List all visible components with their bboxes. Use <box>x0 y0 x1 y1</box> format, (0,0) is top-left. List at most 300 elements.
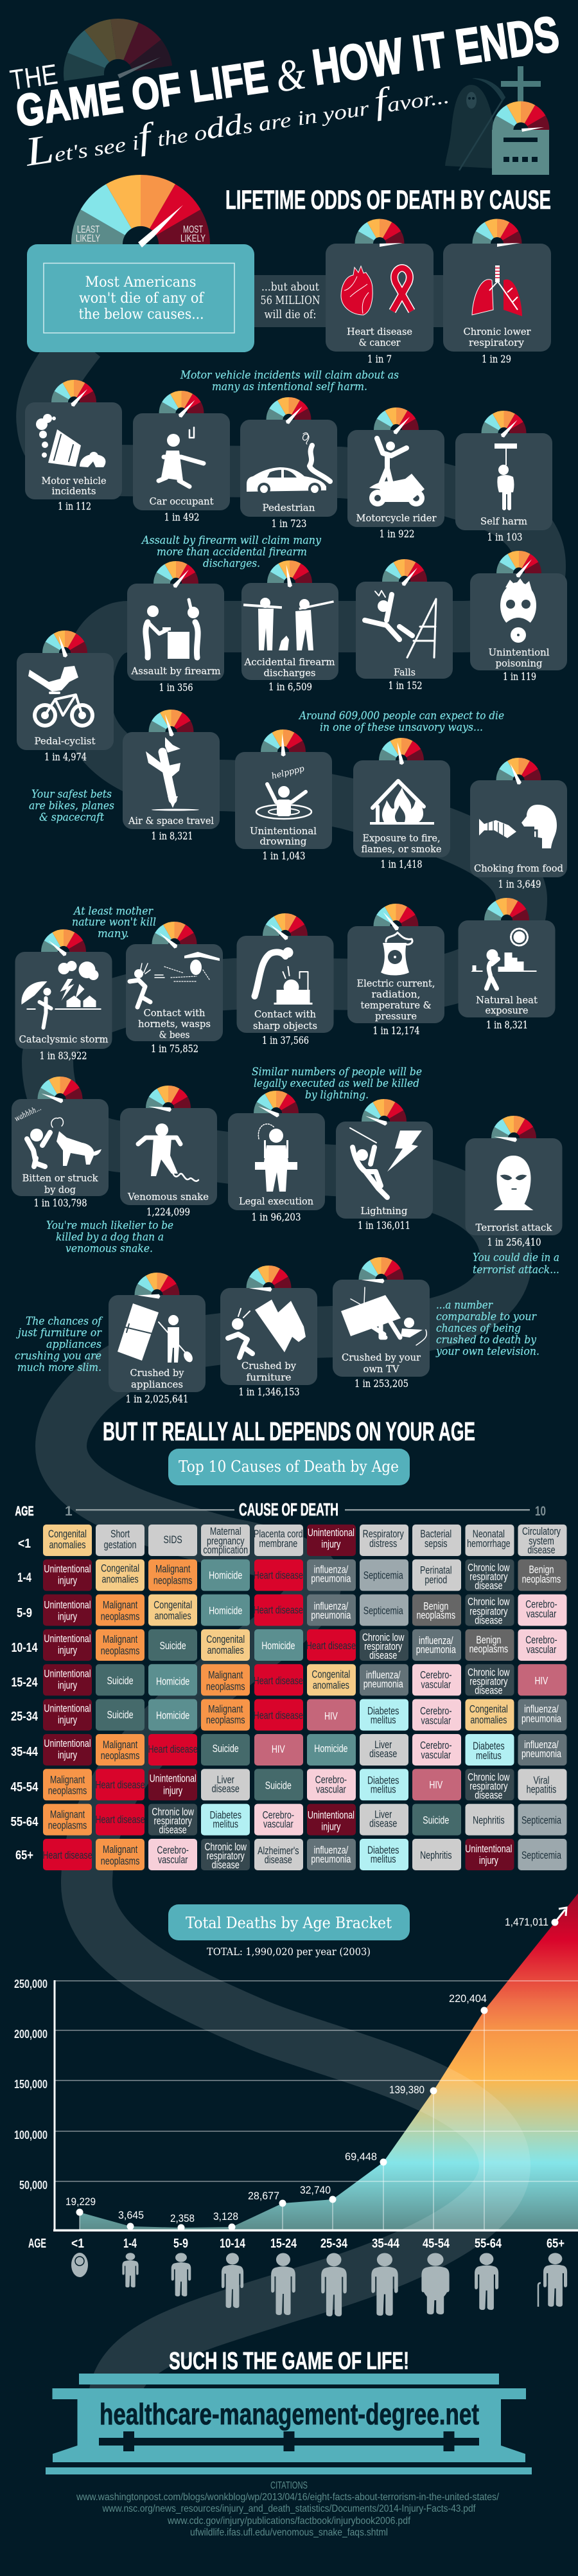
note: mother nature: nature won't kill <box>72 916 156 928</box>
row: under 1: SIDS <box>164 1534 182 1546</box>
card: electric current <box>347 904 444 1037</box>
row: 10-14: Unintentional <box>44 1633 91 1645</box>
row: 10-14: Cerebro- <box>525 1634 557 1647</box>
tomb with site name <box>46 2374 532 2474</box>
card: falls: Falls <box>394 666 416 678</box>
row: 25-34: Malignant <box>208 1704 243 1715</box>
row: 35-44: injury <box>58 1749 78 1762</box>
y axis labels: 100,000 <box>14 2129 48 2142</box>
row: 65 plus: Nephritis <box>420 1850 452 1862</box>
note: television <box>435 1299 539 1357</box>
card: air and space travel: 1 in 8,321 <box>152 830 193 842</box>
table: causes of death by age <box>42 1525 567 1872</box>
row: 1-4: Septicemia <box>363 1570 403 1582</box>
citations: www.washingtonpost.com/blogs/wonkblog/wp/2013/04/16/eight-facts-about-terrorism-in-the-united-states/ <box>76 2492 499 2503</box>
card: motor vehicle incidents: Motor vehicle <box>41 475 107 487</box>
card: crushed by furniture <box>220 1266 317 1398</box>
row: under 1: Congenital <box>48 1528 87 1541</box>
icon: electric chair <box>255 1124 297 1192</box>
card: chronic lower respiratory <box>443 219 551 365</box>
row: 35-44: HIV <box>272 1744 285 1756</box>
row: 65 plus: neoplasms <box>101 1856 139 1868</box>
card: hornets wasps bees: hornets, wasps <box>138 1018 211 1030</box>
winding road background <box>42 341 540 2404</box>
text: but about 56 million: will die of: <box>265 308 316 321</box>
card: terrorist attack <box>465 1116 563 1248</box>
card: terrorist attack: Terrorist attack <box>475 1222 552 1233</box>
row: 55-64: disease <box>369 1818 397 1830</box>
row: 5-9: Heart disease <box>254 1605 303 1616</box>
row: 10-14: Congenital <box>206 1634 245 1646</box>
card: unintentional poisoning <box>470 551 567 683</box>
note: legal execution and lightning <box>252 1066 422 1101</box>
main gauge with labels: LEAST <box>77 224 100 235</box>
row: 45-54: HIV <box>429 1780 442 1791</box>
table: age row labels: 45-54 <box>10 1780 39 1794</box>
card: heart disease and cancer: Heart disease <box>347 326 412 337</box>
row: 5-9: Homicide <box>209 1606 242 1617</box>
row: 25-34: Diabetes <box>367 1706 399 1717</box>
row: 45-54: injury <box>163 1785 183 1797</box>
row: 5-9: Cerebro- <box>525 1599 557 1611</box>
text: total per year: TOTAL: 1,990,020 per year (2003) <box>207 1945 371 1958</box>
row: 55-64: neoplasms <box>48 1820 87 1832</box>
row: 45-54: neoplasms <box>48 1785 87 1797</box>
card: accidental firearm discharges: 1 in 6,509 <box>268 681 312 693</box>
row: 35-44: disease <box>369 1748 397 1760</box>
y axis labels: 200,000 <box>14 2028 48 2041</box>
data labels: 220,404 <box>449 1992 487 2005</box>
row: 65 plus: disease <box>212 1859 240 1872</box>
data labels: 28,677 <box>248 2190 279 2202</box>
row: 1-4: Heart disease <box>254 1570 303 1582</box>
note: 609,000 <box>298 710 504 733</box>
note: appliances: appliances <box>46 1338 101 1350</box>
row: 10-14: neoplasms <box>469 1643 508 1656</box>
card: choking from food: Choking from food <box>474 863 563 874</box>
row: 55-64: Cerebro- <box>263 1810 294 1821</box>
row: 45-54: Malignant <box>50 1775 85 1786</box>
row: 15-24: disease <box>475 1685 502 1697</box>
data labels: 2,358 <box>170 2212 195 2224</box>
card: lightning: 1 in 136,011 <box>358 1219 410 1231</box>
table header: AGE <box>15 1504 33 1519</box>
row: 1-4: Unintentional <box>44 1564 91 1575</box>
card: falls: 1 in 152 <box>388 679 423 692</box>
row: 1-4: respiratory <box>469 1571 508 1583</box>
row: under 1: distress <box>369 1538 397 1550</box>
note: terrorist attack: You could die in a <box>473 1251 559 1264</box>
row: 45-54: vascular <box>316 1784 346 1796</box>
row: under 1: Bacterial <box>420 1528 451 1541</box>
table header: CAUSE OF DEATH <box>239 1499 338 1519</box>
row: 10-14: pneumonia <box>416 1644 457 1656</box>
row: 65 plus: disease <box>265 1854 292 1866</box>
card: legal execution <box>228 1091 325 1223</box>
icon: tombstone with gauge <box>492 66 550 175</box>
row: 5-9: injury <box>58 1611 78 1623</box>
data labels: 3,128 <box>213 2210 238 2223</box>
card: pedestrian <box>240 397 337 530</box>
row: 55-64: Heart disease <box>95 1814 145 1826</box>
heading: such is the game of life: SUCH IS THE GAME OF LIFE! <box>169 2348 409 2375</box>
card: accidental firearm discharges: Accidental firearm <box>244 656 335 668</box>
row: 45-54: Cerebro- <box>315 1775 347 1786</box>
row: under 1: Circulatory <box>522 1526 561 1538</box>
card: venomous snake <box>120 1086 217 1218</box>
row: 15-24: anomalies <box>313 1680 349 1692</box>
card: venomous snake: Venomous snake <box>127 1191 209 1203</box>
card: crushed by your own TV <box>333 1257 430 1390</box>
table: age row labels: 55-64 <box>10 1815 39 1829</box>
row: 10-14: Benign <box>476 1634 501 1647</box>
row: 45-54: Heart disease <box>95 1780 145 1791</box>
row: 45-54: Viral <box>534 1775 549 1787</box>
main gauge with labels: LIKELY <box>180 233 206 244</box>
row: 55-64: Suicide <box>423 1815 449 1827</box>
citations: www.nsc.org/news_resources/injury_and_death_statistics/Documents/2014-Injury-Facts-43.pdf <box>102 2503 476 2514</box>
button: total deaths <box>168 1904 410 1940</box>
row: 25-34: Heart disease <box>254 1710 303 1722</box>
icon: fridge and person <box>118 1303 195 1364</box>
row: 65 plus: Malignant <box>103 1844 137 1856</box>
icon: hanging figure <box>495 443 517 510</box>
row: 5-9 <box>43 1595 566 1627</box>
row: 1-4: Benign <box>529 1564 554 1576</box>
icon: drowning person: helpppp <box>270 764 306 782</box>
card: chronic lower respiratory: Chronic lower <box>464 326 531 337</box>
card: crushed by furniture: 1 in 1,346,153 <box>239 1386 299 1398</box>
row: 5-9: Malignant <box>103 1600 137 1611</box>
row: 35-44: Heart disease <box>148 1744 198 1756</box>
row: 15-24: vascular <box>421 1679 451 1691</box>
row: 45-54: hepatitis <box>527 1784 556 1796</box>
icon: heat sun and person <box>471 929 537 988</box>
row: 55-64: vascular <box>263 1819 293 1830</box>
row: 45-54: Diabetes <box>367 1775 399 1787</box>
row: under 1 <box>43 1525 566 1557</box>
data labels: 1,471,011 <box>505 1916 548 1928</box>
card: unintentional drowning: 1 in 1,043 <box>262 850 306 862</box>
card: crushed by appliances: 1 in 2,025,641 <box>126 1393 189 1405</box>
data labels: 139,380 <box>389 2084 425 2096</box>
icon: lungs <box>472 265 522 316</box>
icon: person fleeing hive <box>130 952 220 1007</box>
card: cataclysmic storm: 1 in 83,922 <box>40 1050 87 1062</box>
note: motor vehicle: Motor vehicle incidents will claim about as <box>180 369 399 381</box>
row: under 1: disease <box>527 1544 556 1557</box>
text: but about 56 million: ...but about <box>261 280 320 294</box>
icon: car and pedestrian <box>247 433 330 496</box>
table: age row labels: 35-44 <box>11 1745 39 1759</box>
icon: assault with gun <box>146 600 199 659</box>
row: 15-24: pneumonia <box>363 1679 403 1690</box>
row: 15-24: Suicide <box>107 1676 134 1687</box>
card: natural heat exposure: 1 in 8,321 <box>486 1019 528 1031</box>
card: unintentional poisoning: 1 in 119 <box>503 670 536 683</box>
row: 35-44: Cerebro- <box>420 1740 452 1752</box>
note: legal execution and lightning: by lightning. <box>305 1089 369 1101</box>
card: exposure to fire: 1 in 1,418 <box>380 858 423 870</box>
row: 25-34: neoplasms <box>206 1715 245 1726</box>
row: 10-14: disease <box>369 1650 397 1662</box>
row: 15-24: influenza/ <box>366 1670 401 1681</box>
data labels: 3,645 <box>118 2209 144 2221</box>
card: car occupant: Car occupant <box>149 496 213 507</box>
data labels: 32,740 <box>300 2184 331 2196</box>
card: motorcycle rider: Motorcycle rider <box>356 512 437 524</box>
data labels: 69,448 <box>345 2151 377 2163</box>
card: crushed by your own TV: own TV <box>363 1363 400 1375</box>
card: electric current: Electric current, <box>357 978 435 989</box>
note: terrorist attack <box>473 1251 559 1276</box>
card: accidental firearm discharges <box>241 560 338 693</box>
row: 1-4: Congenital <box>101 1563 139 1575</box>
age axis labels: 15-24 <box>270 2237 297 2251</box>
row: 1-4: pneumonia <box>311 1573 351 1585</box>
age axis labels: 55-64 <box>475 2237 502 2251</box>
icons: people by age <box>71 2253 567 2316</box>
note: mother nature <box>72 905 156 940</box>
row: 65 plus: vascular <box>158 1854 188 1866</box>
card: motorcycle rider: 1 in 922 <box>379 528 415 540</box>
row: 35-44: Liver <box>374 1739 392 1751</box>
row: 25-34: Cerebro- <box>420 1706 452 1717</box>
card: crushed by your own TV: 1 in 253,205 <box>355 1377 408 1390</box>
row: 35-44: Homicide <box>314 1743 348 1755</box>
row: 10-14: influenza/ <box>419 1635 453 1647</box>
age axis labels <box>28 2237 565 2251</box>
row: 55-64: melitus <box>213 1819 238 1830</box>
row: 65 plus: Unintentional <box>465 1843 512 1856</box>
age axis labels: 1-4 <box>123 2237 137 2251</box>
card: unintentional poisoning: poisoning <box>496 657 543 669</box>
card: crushed by appliances <box>109 1273 206 1405</box>
row: 35-44: neoplasms <box>101 1750 139 1762</box>
row: 55-64: Malignant <box>50 1809 85 1821</box>
icon: two hunters and dog <box>243 598 334 650</box>
row: 10-14: Chronic low <box>362 1632 405 1644</box>
note: television: chances of being <box>436 1322 521 1334</box>
age axis labels: <1 <box>71 2237 84 2251</box>
row: 35-44: melitus <box>476 1750 502 1762</box>
icon: motorcycle rider <box>369 438 425 506</box>
row: under 1: injury <box>321 1539 341 1551</box>
y axis labels: 150,000 <box>14 2078 48 2091</box>
row: under 1: sepsis <box>425 1538 448 1550</box>
note: safest bets: Your safest bets <box>31 788 112 800</box>
row: 45-54: disease <box>212 1784 240 1795</box>
card: chronic lower respiratory: 1 in 29 <box>482 353 511 365</box>
row: 15-24 <box>43 1664 566 1697</box>
title: & <box>273 49 309 102</box>
panel: most Americans <box>27 244 254 352</box>
row: 25-34: anomalies <box>470 1715 507 1726</box>
card: heart disease and cancer: 1 in 7 <box>367 353 392 365</box>
card: falls <box>356 559 453 692</box>
row: 10-14: Suicide <box>160 1640 186 1652</box>
card: air and space travel <box>123 710 220 842</box>
table: age row labels: 1-4 <box>17 1571 32 1585</box>
row: 65 plus: injury <box>479 1855 498 1867</box>
row: 10-14: injury <box>58 1645 78 1657</box>
row: 5-9: Congenital <box>153 1600 192 1611</box>
icon: fish bone and head <box>479 805 557 848</box>
icon: nuclear tower <box>381 933 412 976</box>
row: 5-9: Septicemia <box>363 1606 403 1617</box>
note: legal execution and lightning: legally executed as well be killed <box>254 1077 419 1089</box>
note: firearms: more than accidental firearm <box>157 546 307 558</box>
note: television: ...a number <box>436 1299 493 1311</box>
note: dog vs snake: You're much likelier to be <box>46 1219 173 1231</box>
row: under 1: Short <box>110 1528 130 1541</box>
y axis labels: 250,000 <box>14 1978 48 1990</box>
row: 5-9: anomalies <box>155 1611 191 1622</box>
card: lightning <box>336 1099 433 1231</box>
note: firearms: discharges. <box>203 557 260 569</box>
card: choking from food <box>470 758 567 890</box>
row: 35-44 <box>43 1734 566 1766</box>
row: under 1: system <box>529 1535 554 1548</box>
table: age row labels: 10-14 <box>12 1641 38 1655</box>
row: under 1: Unintentional <box>308 1527 355 1539</box>
card: motorcycle rider <box>347 407 444 540</box>
connecting strip <box>254 275 549 327</box>
row: 15-24: neoplasms <box>206 1681 245 1693</box>
row: 65 plus: pneumonia <box>311 1854 351 1866</box>
card: natural heat exposure: Natural heat <box>476 994 538 1006</box>
card: chronic lower respiratory: respiratory <box>469 337 525 348</box>
card: sharp objects: Contact with <box>254 1008 316 1020</box>
card: assault by firearm: Assault by firearm <box>131 665 221 677</box>
row: under 1: Respiratory <box>363 1528 404 1541</box>
row: 65 plus: melitus <box>371 1854 396 1866</box>
card: assault by firearm <box>127 561 224 693</box>
row: 15-24: injury <box>58 1680 78 1692</box>
y axis labels <box>14 1978 48 2192</box>
card: crushed by appliances: Crushed by <box>130 1367 184 1379</box>
card: heart disease and cancer: & cancer <box>358 337 401 348</box>
icon: falling plane <box>146 737 199 811</box>
note: firearms: Assault by firearm will claim many <box>141 534 322 546</box>
table header: 10 <box>535 1504 546 1519</box>
row: 45-54 <box>43 1769 566 1802</box>
row: 1-4: period <box>425 1575 447 1586</box>
table: age row labels: <1 <box>18 1537 31 1551</box>
row: 15-24: Chronic low <box>468 1667 510 1679</box>
title <box>8 5 563 136</box>
subtitle: Let's see i f the odds are in your favor... <box>21 66 451 175</box>
card: legal execution: Legal execution <box>239 1195 313 1207</box>
icon: balaclava <box>493 1156 533 1210</box>
row: 1-4: disease <box>475 1580 502 1592</box>
area chart fill: total deaths <box>80 1893 578 2230</box>
card: self harm: 1 in 103 <box>487 531 523 543</box>
row: 55-64: injury <box>321 1821 341 1833</box>
card: venomous snake: 1,224,099 <box>146 1206 190 1218</box>
table: age row labels: 65+ <box>15 1848 33 1863</box>
data labels <box>66 1916 548 2224</box>
age axis labels: 35-44 <box>372 2237 400 2251</box>
row: 10-14: respiratory <box>364 1641 403 1653</box>
panel: most Americans: Most Americans <box>85 274 197 291</box>
card: sharp objects <box>236 913 334 1046</box>
row: 65 plus: Septicemia <box>521 1850 562 1862</box>
row: 55-64: Liver <box>374 1809 392 1821</box>
note: appliances: much more slim. <box>17 1361 101 1373</box>
row: under 1: hemorrhage <box>467 1538 511 1550</box>
row: 25-34 <box>43 1699 566 1731</box>
text: but about 56 million <box>261 280 320 321</box>
card: natural heat exposure: exposure <box>486 1005 529 1016</box>
panel: most Americans: the below causes... <box>78 307 204 323</box>
row: under 1: anomalies <box>49 1539 86 1552</box>
icon: falling TV <box>341 1287 426 1345</box>
card: heart disease and cancer <box>326 219 434 365</box>
card: pedal-cyclist: Pedal-cyclist <box>35 735 95 747</box>
note: dog vs snake <box>46 1219 173 1255</box>
card: motor vehicle incidents: 1 in 112 <box>58 500 91 512</box>
text: but about 56 million: 56 MILLION <box>261 294 320 307</box>
icon: crashed car <box>36 414 105 467</box>
card: bitten by dog: by dog <box>44 1184 76 1195</box>
row: 5-9: influenza/ <box>314 1601 349 1613</box>
card: car occupant: 1 in 492 <box>164 511 199 523</box>
row: 1-4: influenza/ <box>314 1564 349 1576</box>
age axis labels: 10-14 <box>220 2237 246 2251</box>
card: hornets wasps bees: Contact with <box>144 1007 206 1019</box>
citations: CITATIONS <box>270 2480 308 2491</box>
note: appliances: just furniture or <box>15 1327 102 1339</box>
row: 5-9: respiratory <box>469 1606 508 1618</box>
card: exposure to fire: Exposure to fire, <box>362 832 441 844</box>
age axis labels: 65+ <box>547 2237 565 2251</box>
card: exposure to fire: flames, or smoke <box>361 843 442 855</box>
card: bitten by dog: 1 in 103,798 <box>33 1197 87 1209</box>
note: appliances <box>15 1315 103 1373</box>
card: pedal-cyclist <box>17 631 114 763</box>
row: 35-44: Diabetes <box>473 1740 505 1753</box>
main gauge with labels <box>71 175 210 262</box>
table: age row labels: 5-9 <box>17 1606 32 1620</box>
citations: ufwildlife.ifas.ufl.edu/venomous_snake_faqs.shtml <box>190 2527 388 2538</box>
data labels: 19,229 <box>66 2196 96 2208</box>
row: 55-64: Nephritis <box>473 1815 505 1827</box>
title: THE <box>8 58 60 96</box>
note: mother nature: many. <box>98 927 129 940</box>
main gauge with labels: MOST <box>183 224 203 235</box>
row: 65 plus: Alzheimer's <box>258 1845 299 1857</box>
note: television: crushed to death by <box>436 1334 537 1346</box>
button: top 10 causes: Top 10 Causes of Death by Age <box>179 1458 399 1476</box>
note: dog vs snake: venomous snake. <box>66 1242 153 1255</box>
card: bitten by dog <box>12 1077 109 1209</box>
panel: most Americans: won't die of any of <box>79 291 205 307</box>
row: 25-34: injury <box>58 1715 78 1726</box>
note: motor vehicle: many as intentional self harm. <box>212 380 367 393</box>
note: terrorist attack: terrorist attack... <box>473 1264 559 1276</box>
row: 55-64: Unintentional <box>308 1810 355 1821</box>
icon: gas mask <box>500 578 536 643</box>
icon: heart and ribbon <box>341 266 412 315</box>
card: car occupant <box>133 391 230 523</box>
icon: dog attack <box>13 1103 101 1167</box>
row: 45-54: melitus <box>371 1784 396 1796</box>
row: 25-34: Suicide <box>107 1710 134 1721</box>
note: mother nature: At least mother <box>73 905 153 917</box>
row: 25-34: melitus <box>371 1715 396 1726</box>
table: age row labels <box>10 1537 39 1863</box>
